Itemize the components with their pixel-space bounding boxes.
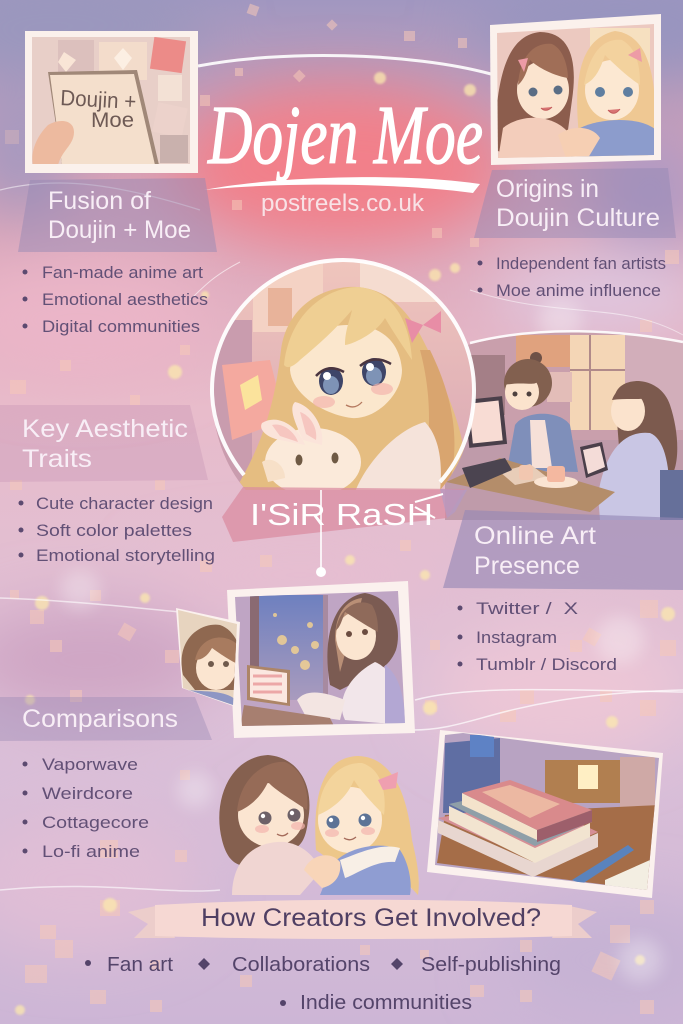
heading: Traits — [22, 445, 92, 473]
bullet list: Twitter / X — [476, 599, 578, 618]
bangs — [284, 287, 412, 367]
heading — [48, 187, 191, 244]
heading: Online Art — [474, 522, 596, 550]
heading: Presence — [474, 552, 580, 580]
bullet list: Emotional aesthetics — [42, 290, 208, 309]
list: ways to get involved — [85, 954, 561, 1014]
monitor — [464, 396, 507, 448]
bullet list: Instagram — [476, 628, 557, 647]
list: ways to get involved: Fan art — [107, 954, 173, 976]
heading: Fusion of — [48, 187, 151, 215]
panel: Key Aesthetic Traits — [0, 405, 215, 565]
photo: stack of books — [427, 730, 665, 898]
bullet list: Emotional storytelling — [36, 546, 215, 565]
hair back — [235, 287, 466, 490]
title underline swoosh — [204, 177, 480, 193]
list: ways to get involved: Indie communities — [300, 992, 472, 1014]
list: ways to get involved: Self-publishing — [421, 954, 561, 976]
bullet list: Vaporwave — [42, 755, 138, 774]
banner: How Creators Get Involved? — [128, 900, 597, 939]
artist one — [507, 414, 578, 472]
photo: Doujin + Moe notebook — [25, 31, 198, 173]
panel: Comparisons — [0, 697, 212, 861]
heading — [474, 522, 596, 580]
bottom book — [438, 820, 598, 877]
bullet list — [478, 254, 666, 300]
notebook handwriting: Moe — [91, 109, 134, 132]
bullet list: Tumblr / Discord — [476, 655, 617, 674]
panel: Fusion of Doujin + Moe — [18, 178, 217, 336]
notebook handwriting: Doujin + — [60, 85, 137, 114]
bullet list: Digital communities — [42, 317, 200, 336]
desk — [446, 458, 615, 512]
bullet list: Lo-fi anime — [42, 842, 140, 861]
bullet list: Cottagecore — [42, 813, 149, 832]
middle book — [449, 806, 590, 863]
heading — [22, 415, 188, 473]
connector arrow — [320, 490, 322, 568]
title: Dojen Moe — [207, 89, 483, 182]
bullet list: Moe anime influence — [496, 281, 661, 300]
heading: Doujin + Moe — [48, 216, 191, 244]
blonde haired friend — [304, 756, 419, 895]
face — [290, 325, 402, 418]
heading: Comparisons — [22, 705, 178, 733]
illustration: artists at desk — [445, 325, 683, 520]
panel: Origins in Doujin Culture — [474, 168, 676, 300]
bullet list — [18, 494, 215, 565]
notebook handwriting — [60, 85, 137, 132]
banner: How Creators Get Involved?: How Creators Get Involved? — [201, 904, 541, 932]
panel: Online Art Presence — [443, 510, 683, 674]
heading: Doujin Culture — [496, 204, 660, 232]
hoodie — [355, 422, 441, 492]
bullet list: Independent fan artists — [496, 254, 666, 273]
website: postreels.co.uk — [261, 190, 425, 217]
banner: glyph ribbon — [222, 487, 467, 577]
photo: creator at window — [227, 581, 415, 738]
bullet list: Fan-made anime art — [42, 263, 203, 282]
bullet list: Weirdcore — [42, 784, 133, 803]
photo: two friends — [490, 14, 661, 165]
bullet list — [22, 755, 149, 861]
bullet list: Cute character design — [36, 494, 213, 513]
bunny plush — [265, 428, 361, 496]
eyes — [319, 367, 343, 395]
bullet list — [22, 263, 208, 336]
heading — [496, 175, 660, 232]
list: ways to get involved: Collaborations — [232, 954, 370, 976]
illustration: central character portrait — [210, 258, 476, 496]
brown haired friend — [219, 755, 320, 895]
hair bow — [405, 311, 441, 343]
artist two — [615, 381, 677, 480]
illustration: two friends holding hands — [219, 755, 419, 895]
title block — [204, 89, 483, 217]
photo: torn corner portrait — [176, 608, 242, 708]
bullet list — [458, 599, 617, 674]
top book — [462, 793, 592, 840]
ribbon lettering: I'SiR RaSH — [250, 497, 433, 532]
bullet list: Soft color palettes — [36, 521, 192, 540]
heading: Origins in — [496, 175, 599, 203]
heading: Key Aesthetic — [22, 415, 188, 443]
